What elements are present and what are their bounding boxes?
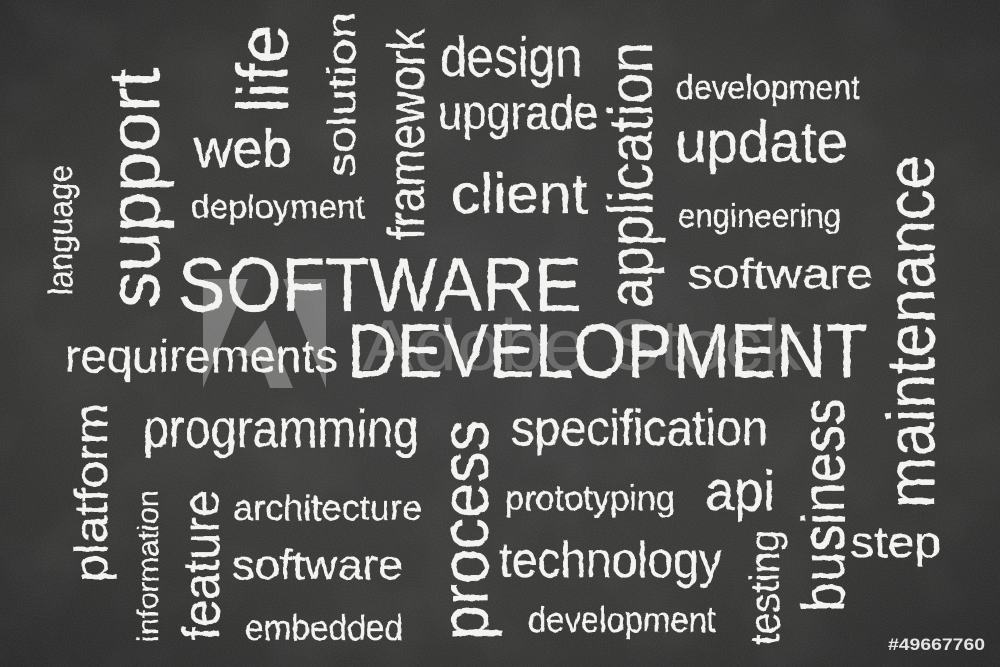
horizontal words: embedded [245, 607, 403, 648]
horizontal words: deployment [191, 188, 365, 225]
horizontal words: specification [511, 400, 768, 456]
vertical words: language [42, 165, 80, 295]
horizontal words: software [232, 541, 403, 588]
horizontal words: requirements [65, 330, 338, 382]
watermark text: Adobe Stock [362, 306, 803, 386]
vertical words: solution [320, 12, 364, 177]
vertical words: framework [378, 27, 436, 240]
vertical words: platform [65, 403, 117, 582]
horizontal words: upgrade [438, 87, 598, 140]
headline: software development: DEVELOPMENT [347, 309, 868, 394]
horizontal words: software [688, 250, 873, 297]
horizontal words: engineering [678, 197, 841, 234]
horizontal words: step [850, 518, 941, 567]
horizontal words: development [528, 599, 716, 640]
image id: #49667760 [888, 635, 985, 654]
headline: software development [178, 243, 868, 394]
horizontal words: architecture [233, 487, 422, 528]
vertical words: testing [741, 530, 788, 645]
vertical words: maintenance [873, 155, 949, 508]
vertical words: application [597, 42, 666, 308]
horizontal words: client [451, 162, 588, 225]
vertical words: support [95, 68, 175, 308]
vertical words: business [790, 398, 857, 612]
horizontal words: api [705, 459, 775, 522]
vertical words: process [427, 420, 503, 640]
horizontal words: update [675, 110, 848, 175]
vertical words: life [224, 25, 304, 113]
horizontal words: technology [499, 532, 722, 588]
horizontal words: programming [143, 399, 419, 459]
horizontal words: prototyping [505, 479, 675, 518]
vertical words: feature [173, 490, 231, 640]
headline: software development: SOFTWARE [178, 243, 582, 328]
horizontal words: design [440, 25, 582, 88]
vertical words: information [132, 490, 165, 642]
horizontal words: development [676, 69, 861, 107]
watermark logo [203, 279, 326, 388]
horizontal words: web [193, 119, 292, 179]
